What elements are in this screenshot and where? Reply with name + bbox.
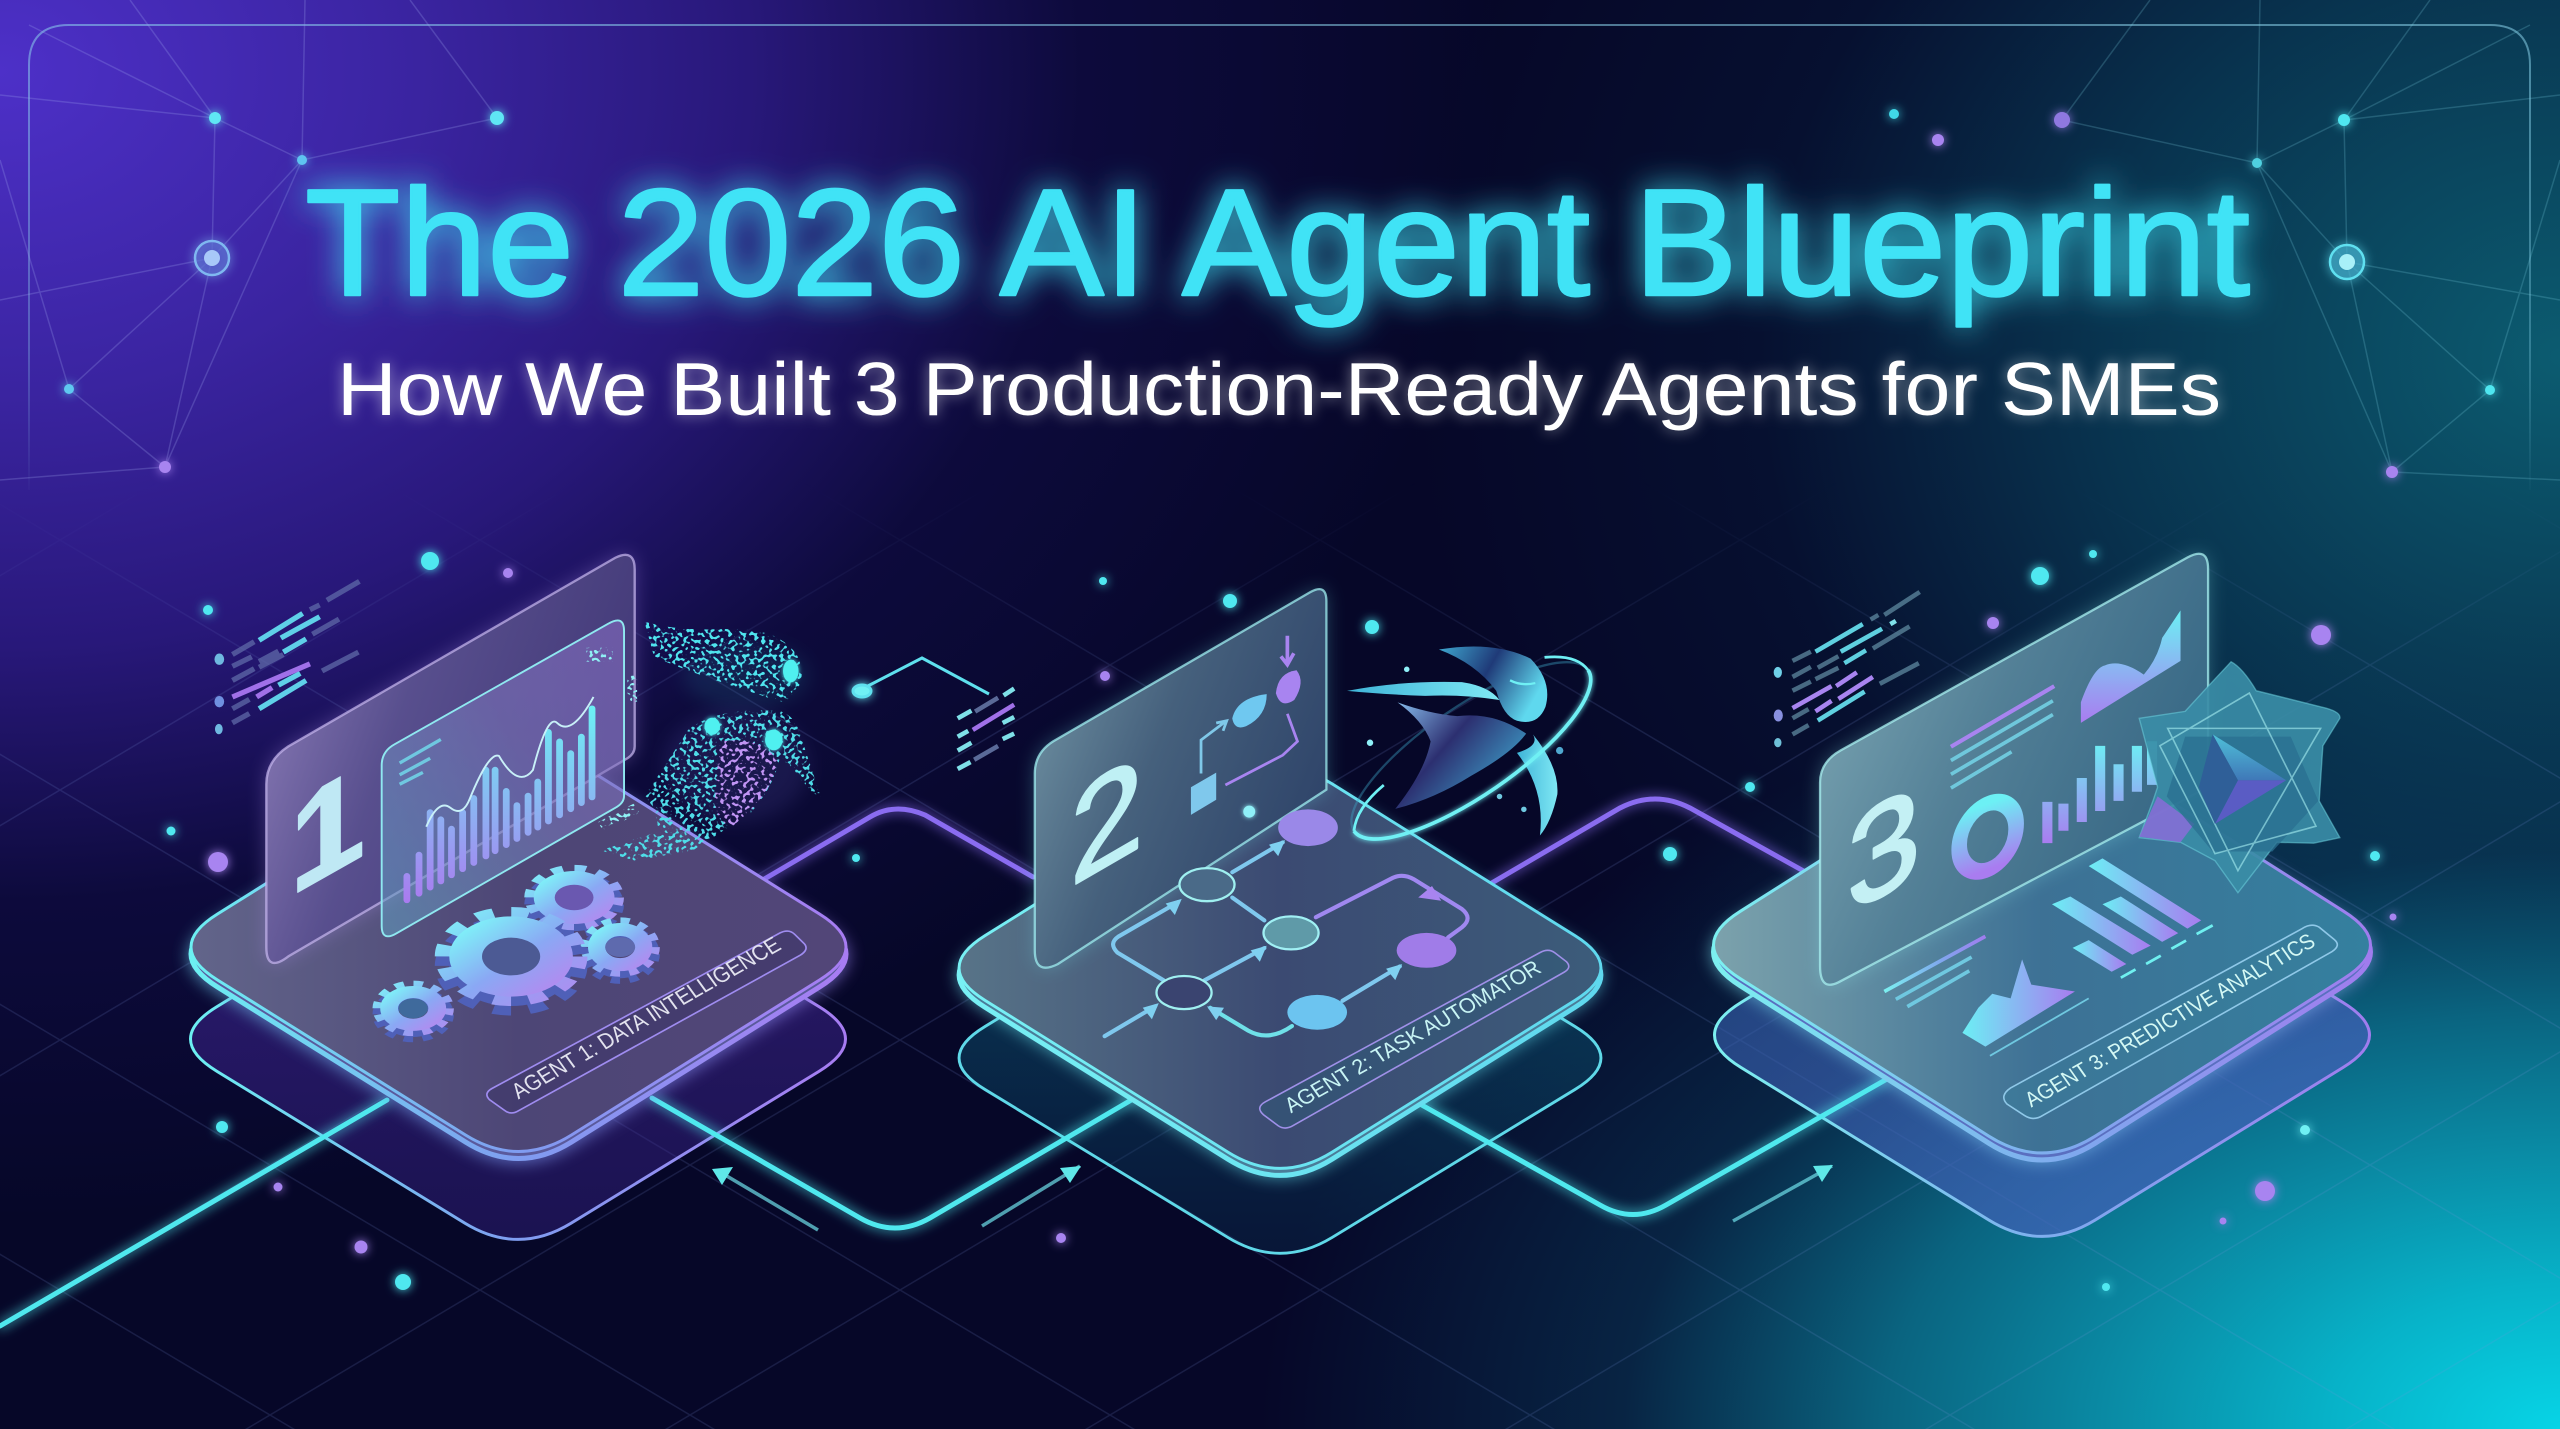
title: The 2026 AI Agent Blueprint [305,158,2250,328]
network: top-left constellation [0,0,504,480]
agent 3 base platform [1714,737,2370,1161]
crystal polyhedron [2139,662,2340,893]
code snippet lines [214,581,359,734]
glass panel with number 1 [266,555,635,963]
panel: agent 1 data intelligence [191,555,846,1160]
label pill [487,931,806,1113]
agent 2 illustration layer [958,589,1613,1128]
agent 3 illustration layer [1774,554,2340,1118]
agent 1 illustration layer [214,555,821,1113]
label pill: AGENT 2: TASK AUTOMATOR [1280,955,1545,1117]
glowing particles [166,550,2396,1291]
floor arrows [712,1165,1833,1230]
panel: agent 3 predictive analytics [1714,554,2370,1161]
glass panel with number 1: 1 [290,734,365,925]
data particle robot [586,621,821,861]
agent 2 base platform [959,768,1601,1176]
decorative frame [29,25,2530,490]
lower glass plates [190,834,2370,1253]
glass panel with number 2: 2 [1070,724,1144,916]
swift bird with orbit [1243,633,1613,868]
label pill [2004,925,2337,1118]
small code block [958,689,1014,769]
purple connector lines [761,799,1809,884]
flow diagram [1105,809,1468,1036]
glass panel with number 3 [1820,554,2208,985]
network: top-right constellation [1889,0,2560,480]
faint isometric floor grid [0,480,2560,1429]
panel: agent 2 task automator [958,589,1613,1176]
small link between agents 1 and 2 [853,658,989,697]
teal connector lines [0,1079,1887,1326]
gears [379,870,653,1038]
code snippet lines [1774,592,1920,747]
glass panel with number 3: 3 [1847,755,1921,944]
label pill: AGENT 1: DATA INTELLIGENCE [507,933,786,1104]
floor bars and charts [1884,858,2213,1056]
glass panel with number 2 [1035,589,1326,968]
agent 1 base platform [191,742,846,1160]
inner chart screen [382,620,624,936]
subtitle: How We Built 3 Production-Ready Agents for SMEs [337,347,2221,431]
label pill: AGENT 3: PREDICTIVE ANALYTICS [2020,929,2320,1112]
